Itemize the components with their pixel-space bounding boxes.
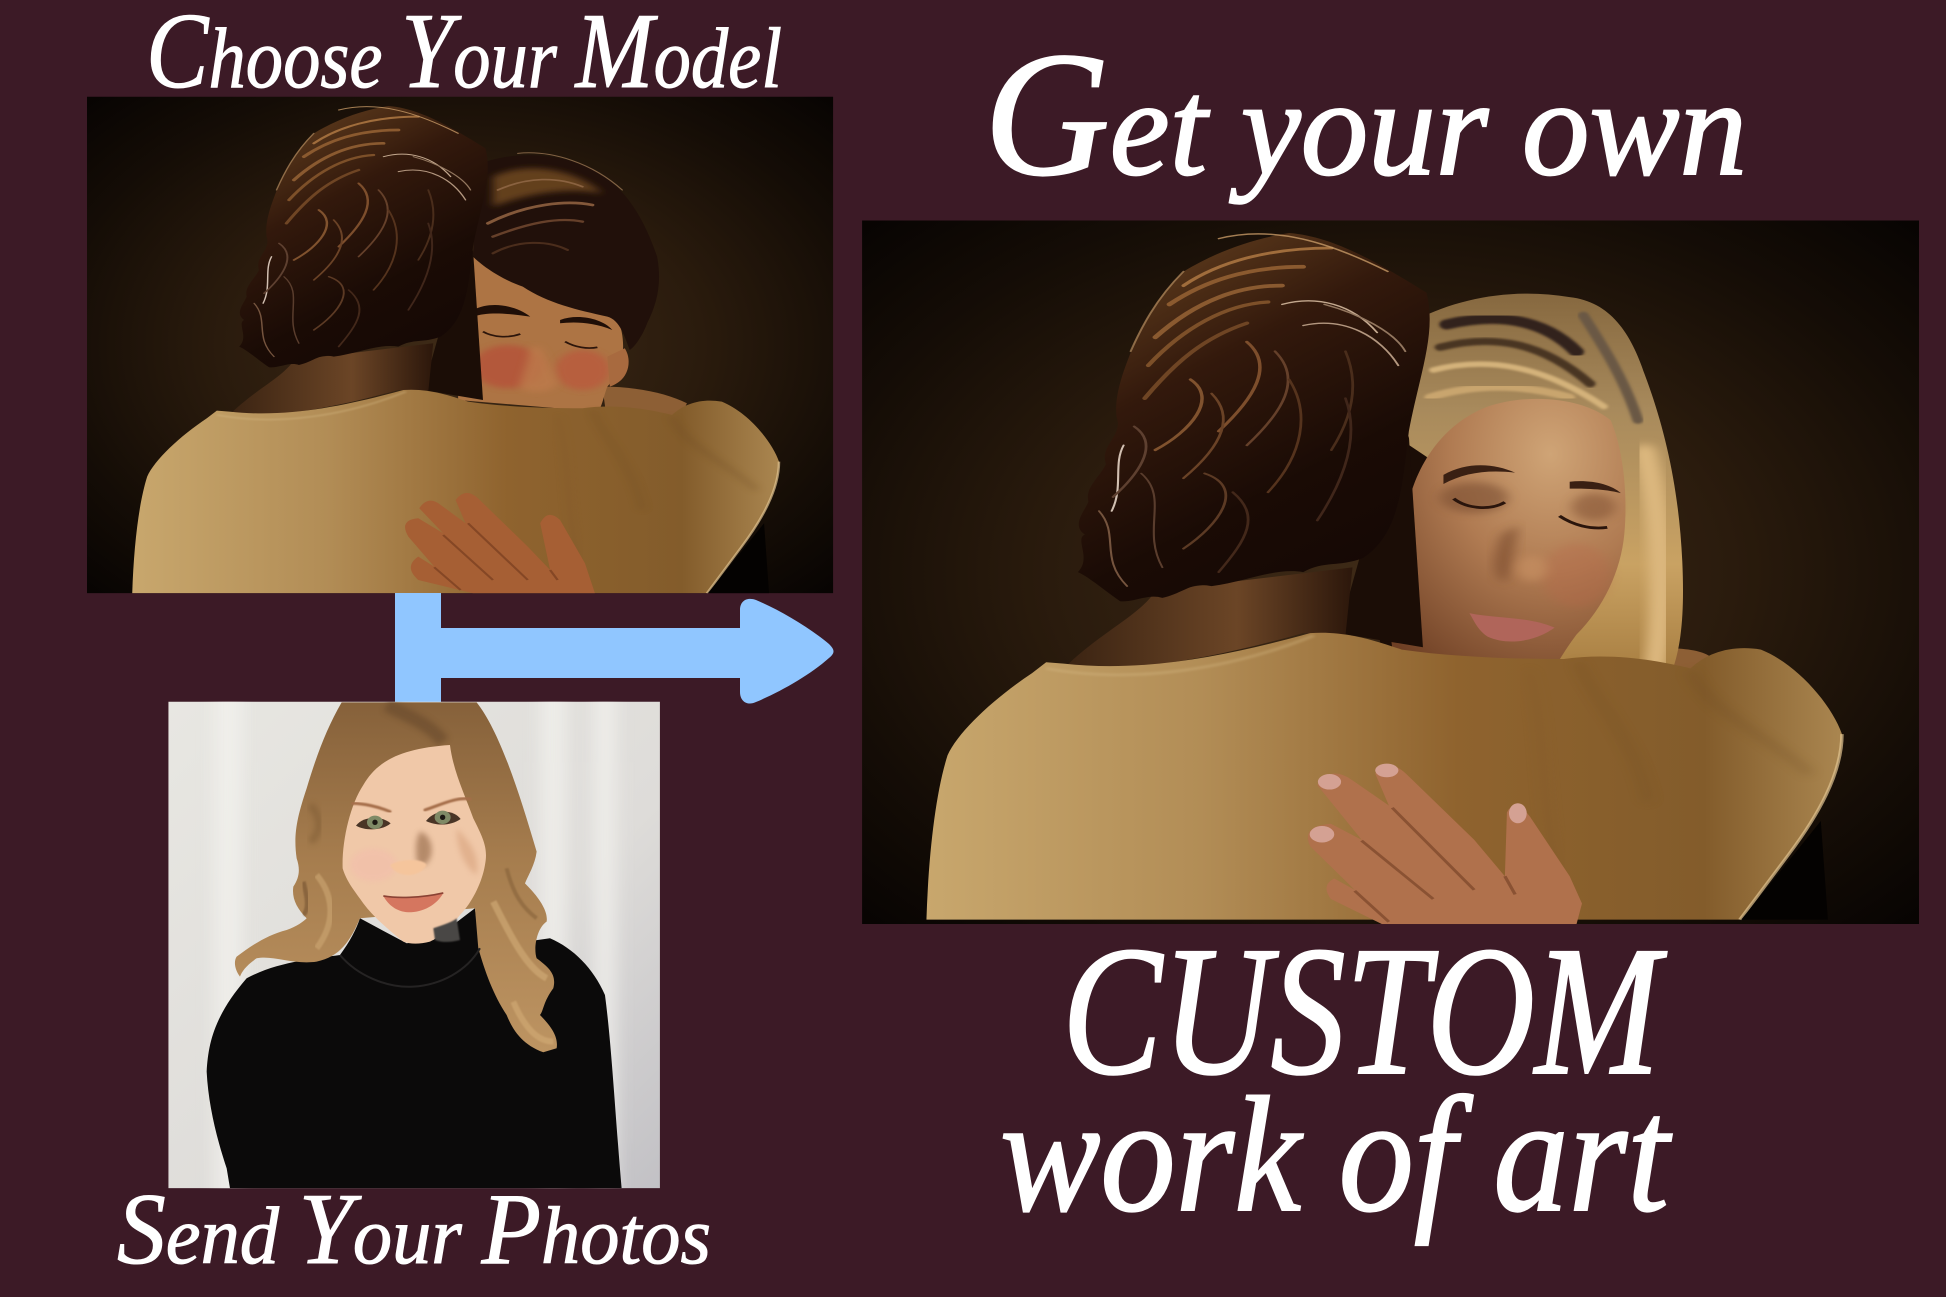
heading: work of art: work of art: [1000, 1063, 1673, 1246]
face: [1390, 399, 1626, 676]
arrow: from photos to final artwork: [395, 593, 834, 704]
lips: [383, 893, 443, 912]
man seen from behind: hair, neck, shirt: [132, 106, 779, 593]
heading: Get your own: Get your own: [984, 15, 1747, 213]
black turtleneck: [207, 908, 622, 1188]
heading: CUSTOM: CUSTOM: [1062, 909, 1667, 1114]
photo: finished custom artwork, embrace with blonde woman: [862, 220, 1919, 924]
heading: Send Your Photos: Send Your Photos: [117, 1173, 711, 1286]
hand on shoulder: [405, 493, 595, 593]
photo: customer portrait, woman in black turtleneck: [168, 678, 660, 1212]
turtleneck fold: [340, 948, 480, 987]
face: [343, 745, 486, 944]
brows and eyes: [353, 803, 390, 812]
hair: [235, 702, 557, 1052]
hand on shoulder: [1308, 764, 1582, 924]
man seen from behind: hair, neck, shirt: [926, 233, 1842, 920]
photo: model reference, embrace with young man: [87, 97, 833, 593]
blonde hair: [1406, 294, 1683, 680]
